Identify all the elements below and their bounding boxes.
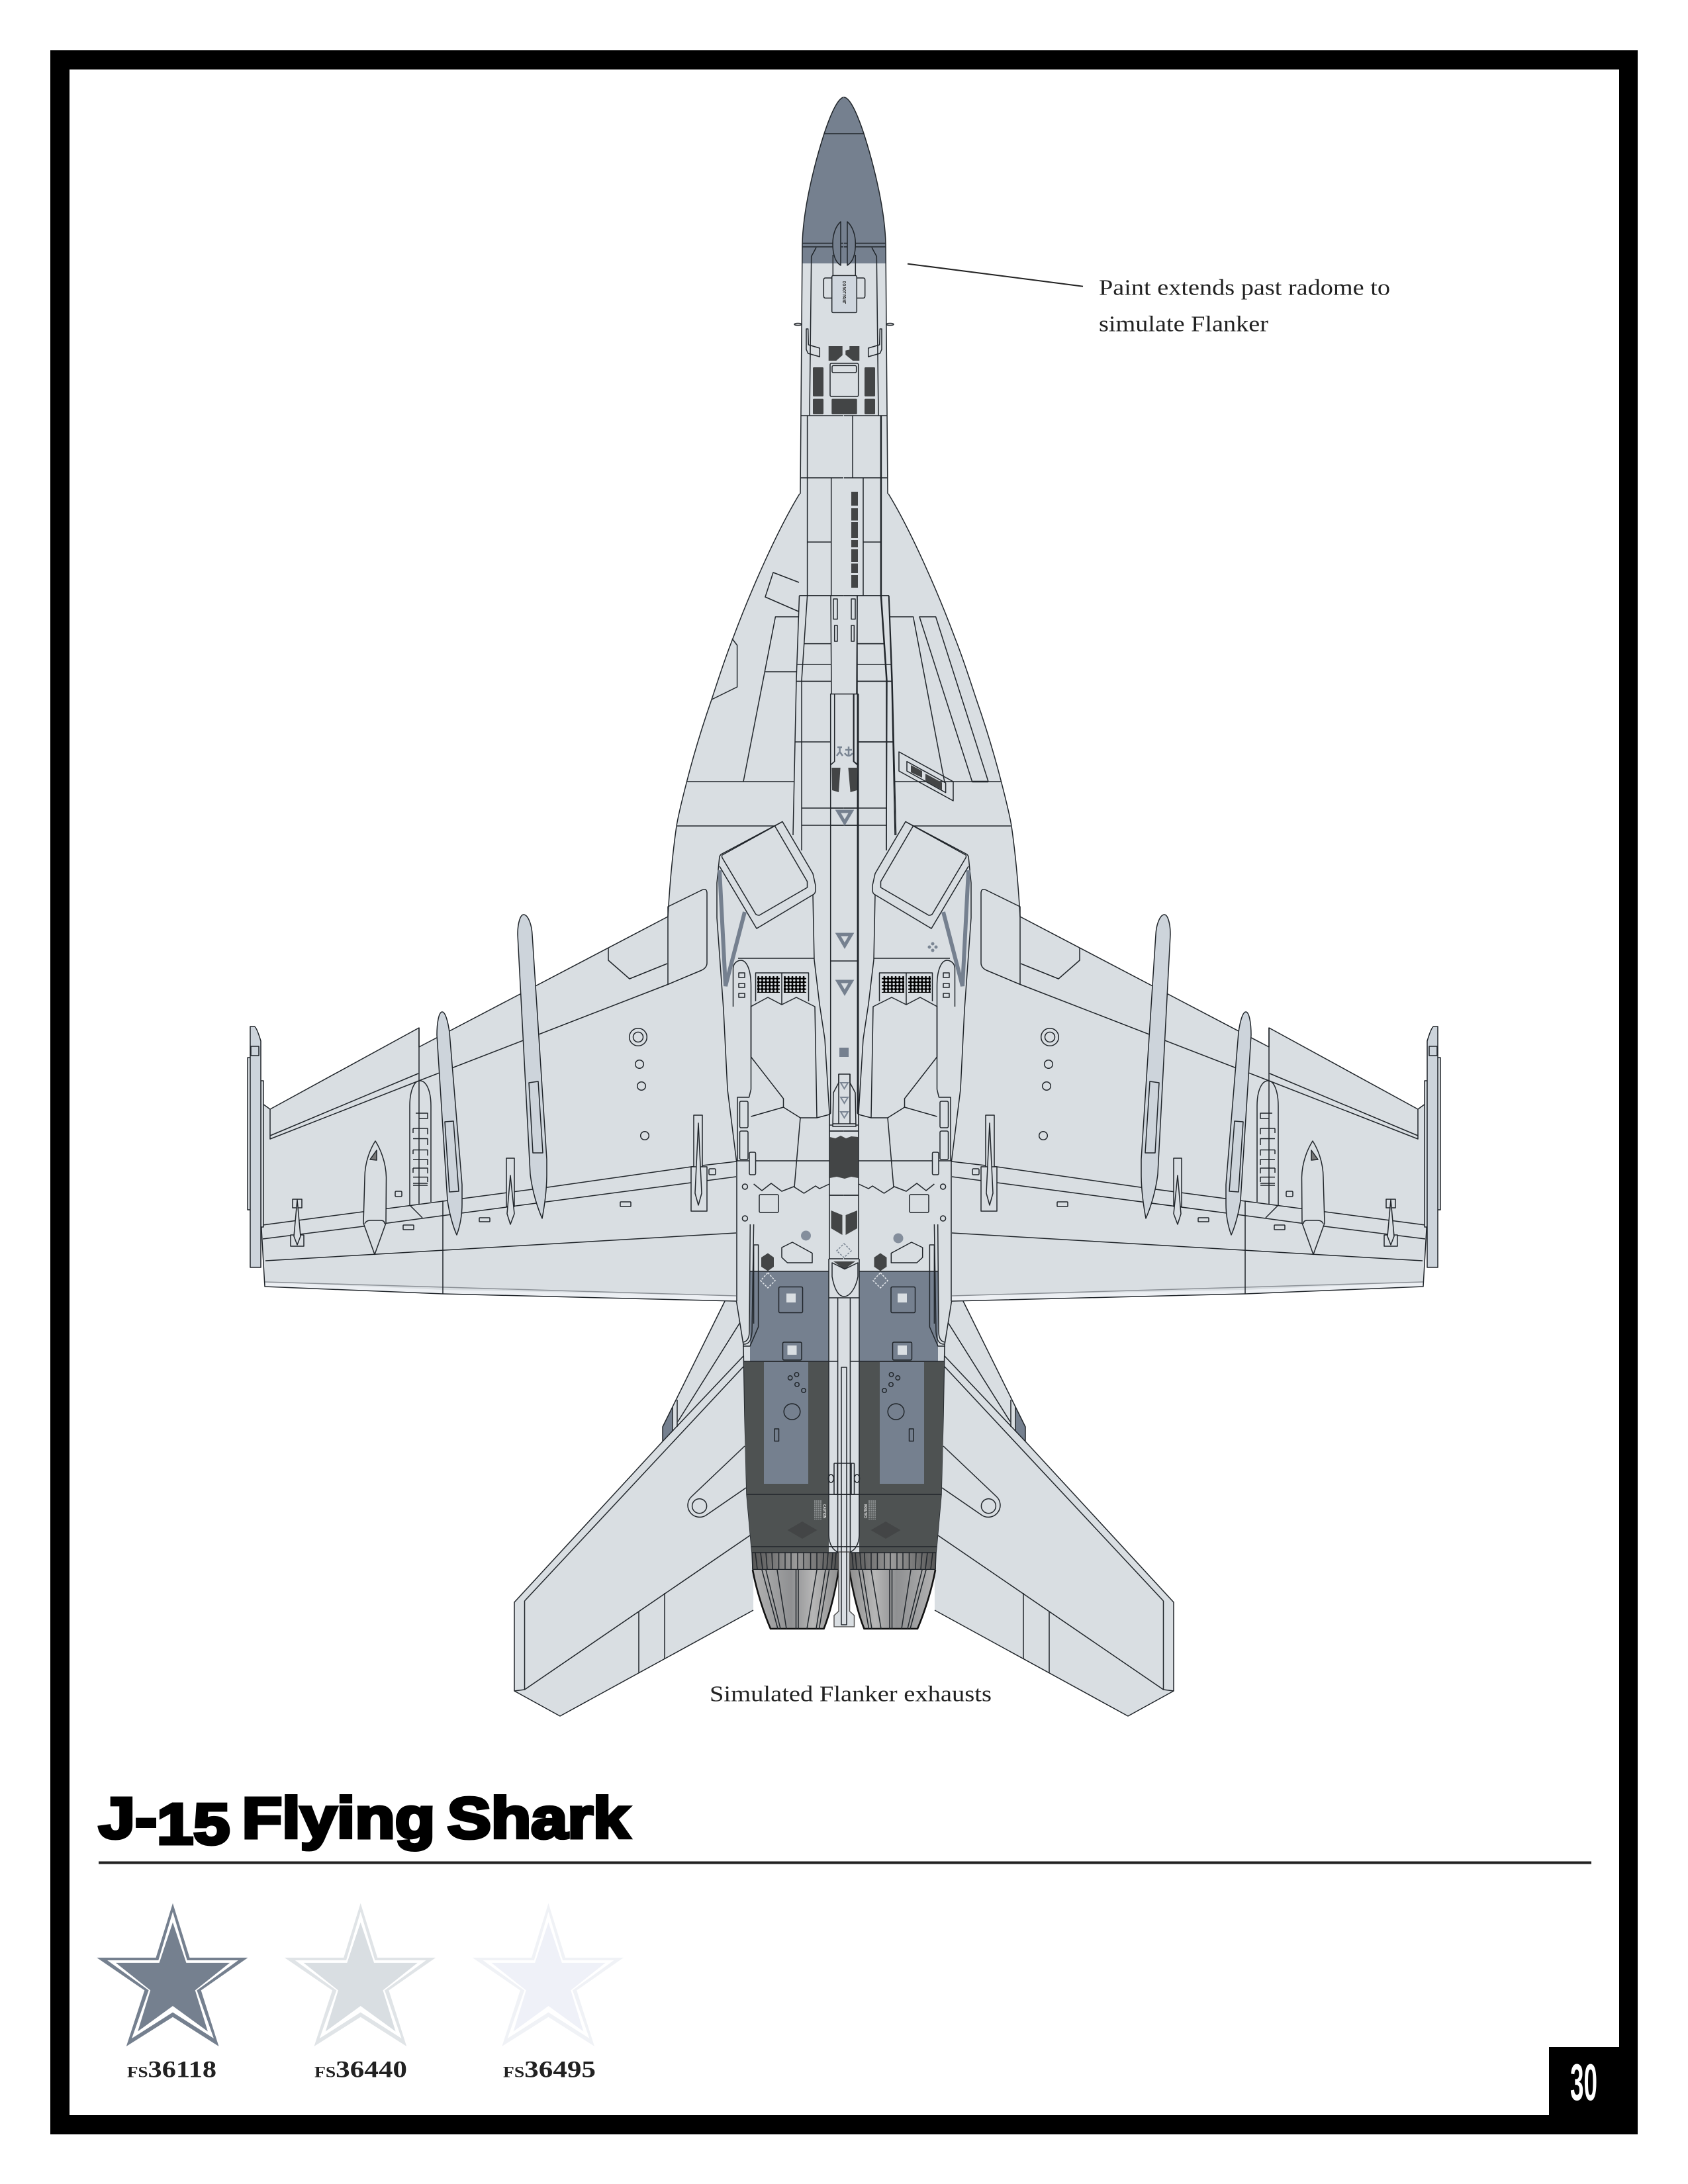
right LEX vent	[899, 752, 953, 801]
spine panel lines and dorsal blocks	[800, 416, 889, 1195]
dark open-book marking	[831, 1210, 857, 1235]
wing pod	[363, 1141, 387, 1255]
forward fuselage symmetric panel lines and vents	[677, 244, 844, 1259]
white dashed diamonds	[761, 1244, 888, 1288]
caution markings on exhaust section: CAUTION	[865, 1504, 868, 1518]
page number box: 30	[1570, 2053, 1597, 2111]
underwing fuel tank inner	[518, 915, 547, 1218]
caution markings on exhaust section	[815, 1500, 875, 1520]
paint swatch star FS36118	[97, 1903, 248, 2046]
dorsal dark vent strip	[851, 492, 858, 588]
callout: simulated exhausts: Simulated Flanker exhausts	[710, 1682, 992, 1707]
do not paint sensor panel	[823, 275, 865, 312]
left and right asymmetrical markings on aft deck	[761, 1231, 923, 1271]
rear fuselage details	[743, 1224, 844, 1553]
page number box	[1549, 2047, 1619, 2120]
swatch label FS36495: FS36495	[503, 2056, 596, 2083]
small gray dots marking near right intake	[928, 942, 937, 952]
do not paint sensor panel: DO NOT PAINT	[841, 281, 846, 304]
gray square marker	[839, 1048, 849, 1057]
air intake	[717, 822, 829, 1161]
nozzle diamond marking	[788, 1522, 817, 1539]
callout: paint past radome: Paint extends past radome to	[1099, 276, 1390, 300]
rear fuselage blue-gray engine panel	[764, 1362, 808, 1484]
rear fuselage paint: dark section	[744, 1361, 829, 1553]
right LEX panel lines	[857, 416, 988, 850]
aircraft right half (mirror of left half)	[843, 97, 1440, 1716]
dorsal panel with small triangles	[833, 1074, 856, 1126]
small gray spine icons	[837, 747, 853, 756]
title: 15	[157, 1792, 230, 1856]
paint swatch star FS36440	[285, 1903, 436, 2046]
title: Flying Shark	[230, 1786, 630, 1850]
dark spine block	[830, 1136, 858, 1179]
radome pitot fairing	[824, 134, 864, 275]
intake vents, ducts and leading edge root	[733, 958, 844, 1301]
paint swatch star FS36495	[473, 1903, 624, 2046]
wing pylons with small missiles	[291, 1115, 707, 1246]
callout: paint past radome: simulate Flanker	[1099, 312, 1269, 337]
callout: paint past radome	[1099, 276, 1390, 337]
caution markings on exhaust section: CAUTION	[822, 1504, 826, 1518]
wing panel lines	[263, 889, 736, 1294]
engine exhaust collar	[752, 1553, 839, 1570]
tail fairing and hook	[829, 1261, 860, 1627]
forward sensor blocks	[813, 367, 823, 414]
aircraft left half (mirrored for the right)	[248, 97, 845, 1716]
leader line to nose callout	[908, 264, 1083, 287]
nose sensor blocks	[829, 346, 859, 414]
access panels in gray paint	[778, 1287, 915, 1360]
swatch label FS36440: FS36440	[314, 2056, 407, 2083]
swatch label FS36118: FS36118	[127, 2056, 216, 2083]
rear fuselage paint: gray section	[750, 1271, 829, 1361]
title: J-	[99, 1786, 150, 1850]
no-step triangles on spine	[838, 811, 851, 993]
title rule	[99, 1861, 1591, 1864]
left LEX panel lines	[712, 572, 799, 782]
wing tip missile rail	[248, 1026, 263, 1267]
horizontal stabilator	[514, 1301, 755, 1716]
wing and forward fuselage body	[261, 97, 845, 1553]
engine exhaust nozzle	[753, 1570, 839, 1629]
airbrake dark doors	[831, 768, 857, 792]
underwing fuel tank outer	[437, 1012, 462, 1235]
